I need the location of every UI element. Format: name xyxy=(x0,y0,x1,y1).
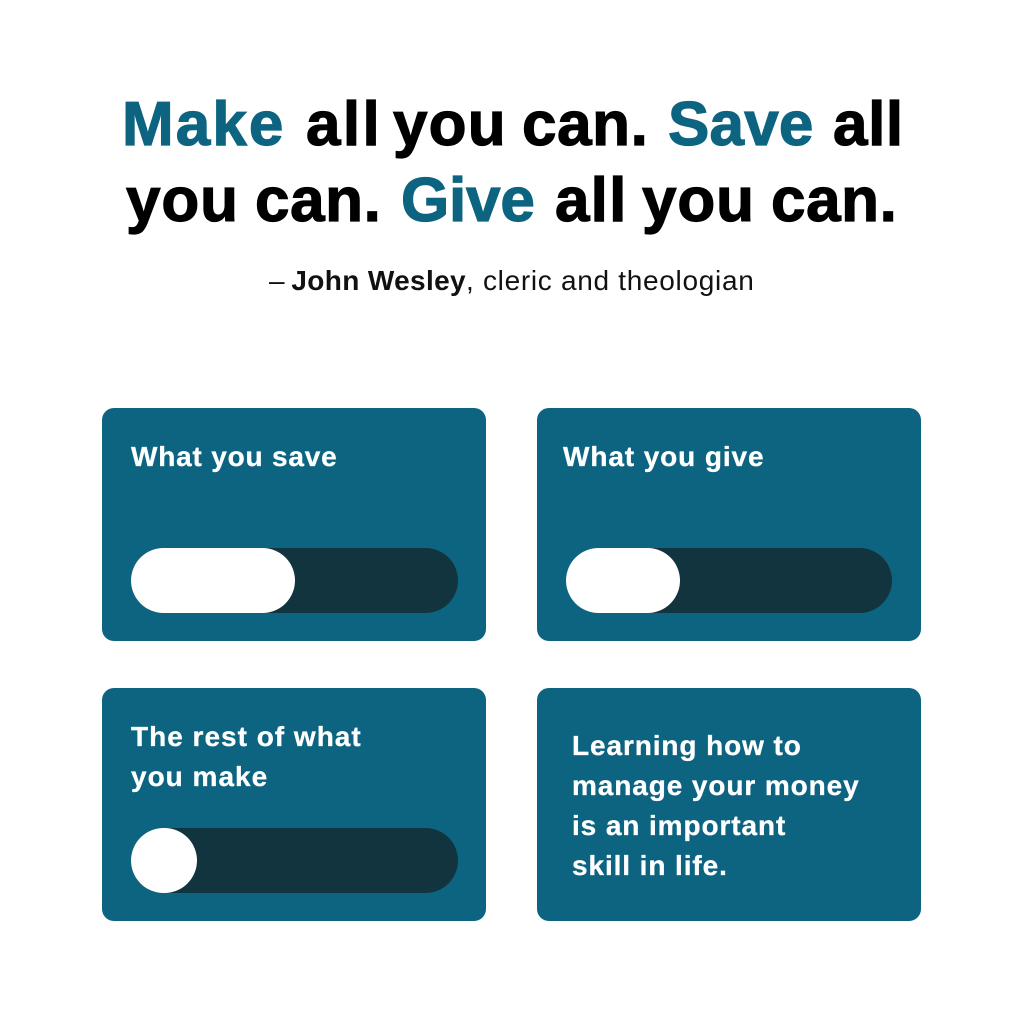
panel: what you save xyxy=(102,408,486,641)
message text: skill in life. xyxy=(572,850,728,881)
title xyxy=(122,90,904,235)
slider: give xyxy=(566,548,892,613)
message text: manage your money xyxy=(572,770,860,801)
slider: save xyxy=(131,548,458,613)
message text: is an important xyxy=(572,810,786,841)
title: you xyxy=(393,90,507,159)
panel: the rest of what you make xyxy=(102,688,486,921)
title: you xyxy=(126,166,239,235)
title: can. xyxy=(522,90,648,159)
message text xyxy=(572,730,860,881)
label: the rest of what you make xyxy=(131,721,362,792)
label: what you give: What you give xyxy=(563,441,764,472)
title: all xyxy=(555,166,628,235)
label: the rest of what you make: you make xyxy=(131,761,268,792)
title: can. xyxy=(771,166,897,235)
title: all xyxy=(306,90,382,159)
title: can. xyxy=(255,166,381,235)
attribution: – John Wesley, cleric and theologian xyxy=(269,265,754,296)
title: you xyxy=(642,166,755,235)
title: Make xyxy=(122,90,286,159)
title: Give xyxy=(401,166,535,235)
slider: rest xyxy=(131,828,458,893)
label: the rest of what you make: The rest of what xyxy=(131,721,362,752)
message text: Learning how to xyxy=(572,730,802,761)
title: Save xyxy=(668,90,814,159)
panel: money message xyxy=(537,688,921,921)
label: what you save: What you save xyxy=(131,441,337,472)
title: all xyxy=(833,90,904,159)
panel: what you give xyxy=(537,408,921,641)
